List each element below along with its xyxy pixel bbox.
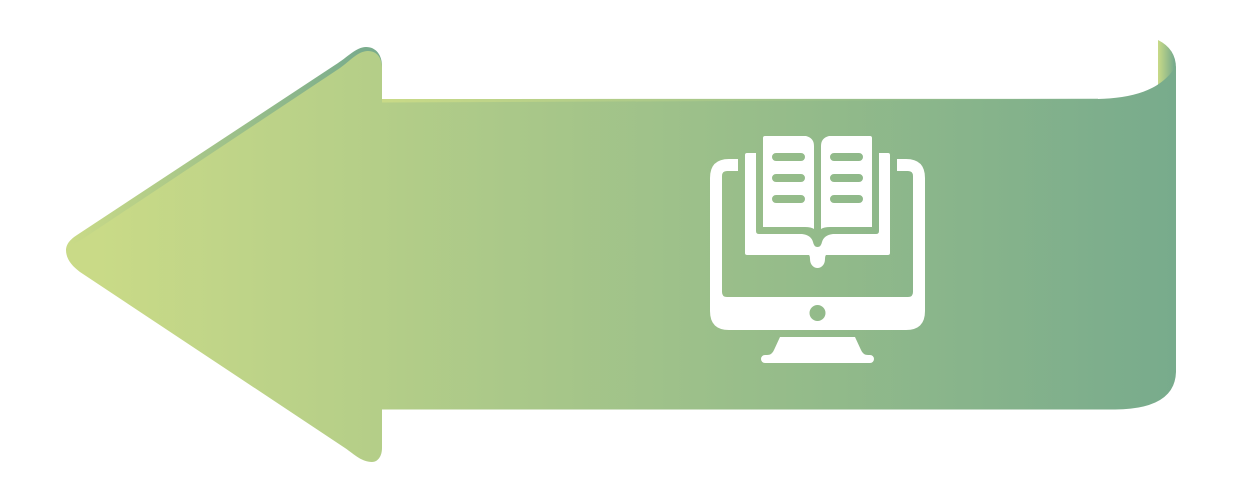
icon: book cover — [745, 153, 890, 268]
arrow back layer: dark upper edge of arrowhead — [66, 47, 382, 250]
icon: computer monitor with open book — [710, 136, 925, 363]
ribbon top edge highlight — [382, 99, 1098, 102]
arrow body: gradient arrow with ribbon tail — [66, 51, 1176, 462]
icon: left book page — [763, 136, 814, 229]
icon: monitor frame — [710, 159, 925, 330]
icon: monitor stand — [761, 337, 874, 363]
icon: right book page — [821, 136, 872, 229]
ribbon fold: curled top right corner — [1158, 40, 1176, 92]
